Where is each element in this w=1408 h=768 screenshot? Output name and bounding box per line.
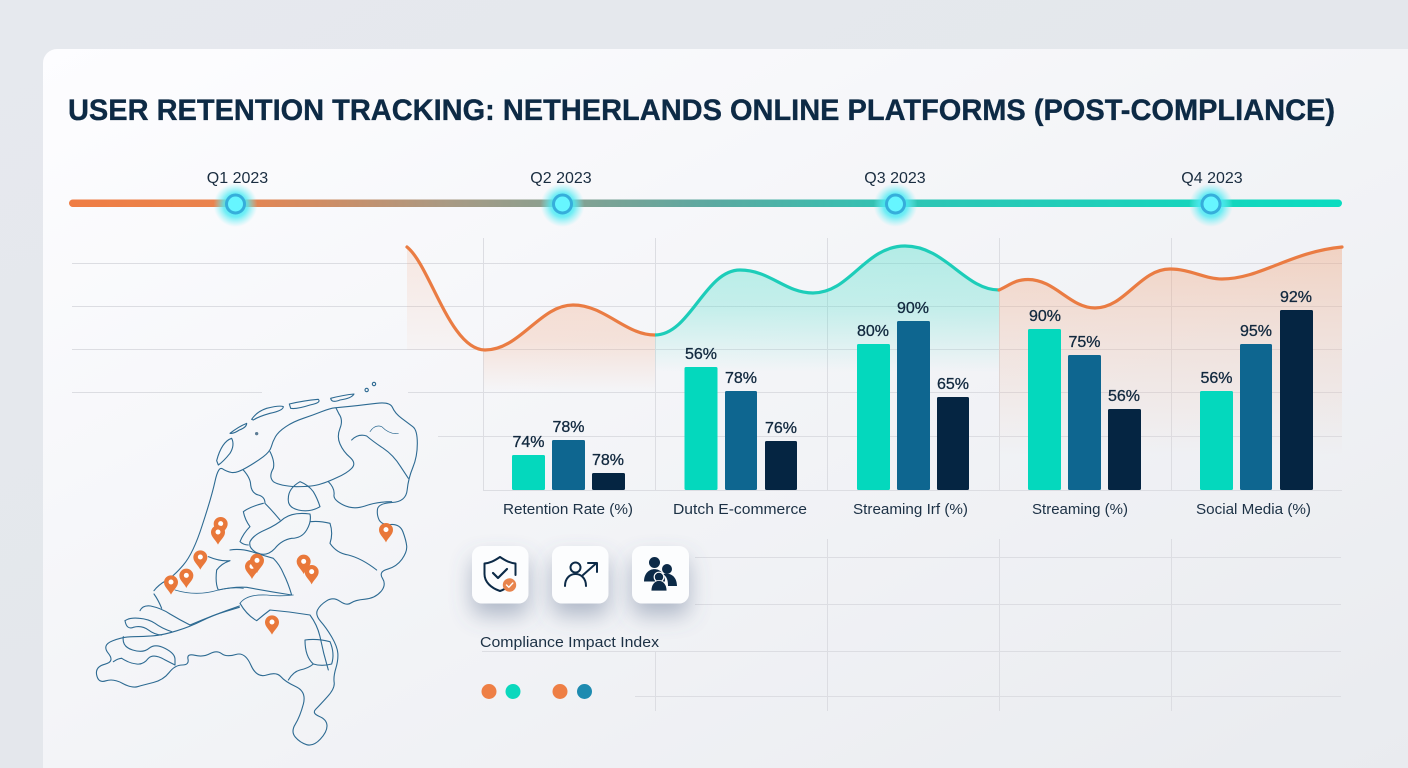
bar group: Retention Rate — [503, 419, 633, 518]
bar group: Social Media: 92% — [1280, 289, 1312, 306]
bar group: Streaming Irf: 80% — [857, 323, 889, 340]
marker: Q2 2023 — [530, 170, 592, 227]
bar group: Streaming: 75% — [1068, 334, 1101, 351]
bar group: Streaming Irf: 65% — [937, 376, 969, 393]
marker: Q2 2023: Q2 2023 — [530, 170, 592, 187]
icon: user group — [632, 546, 689, 604]
bar group: Dutch E-commerce: 78% — [725, 370, 757, 387]
marker: Q1 2023 — [207, 170, 268, 227]
bar group: Dutch E-commerce — [673, 346, 807, 518]
bar group: Social Media: 95% — [1240, 323, 1272, 340]
marker: Q1 2023: Q1 2023 — [207, 170, 268, 187]
timeline bar — [69, 200, 1342, 207]
bar group: Streaming: 56% — [1108, 388, 1140, 405]
location pins — [164, 517, 393, 635]
marker: Q3 2023 — [864, 170, 926, 227]
bar group: Streaming Irf: 90% — [897, 300, 929, 317]
bar group: Streaming Irf — [853, 300, 969, 518]
bar group: Streaming: Streaming (%) — [1032, 501, 1128, 518]
legend dots — [482, 684, 592, 699]
bar group: Social Media: Social Media (%) — [1196, 501, 1311, 518]
title: USER RETENTION TRACKING: NETHERLANDS ONLINE PLATFORMS (POST-COMPLIANCE) — [68, 94, 1335, 127]
bar chart — [503, 289, 1313, 518]
marker: Q4 2023 — [1181, 170, 1243, 227]
bar group: Streaming Irf: Streaming Irf (%) — [853, 501, 968, 518]
bar group: Social Media: 56% — [1200, 370, 1233, 387]
map outline and provinces — [96, 403, 417, 745]
area line chart — [407, 246, 1342, 455]
marker: Q3 2023: Q3 2023 — [864, 170, 926, 187]
bar group: Retention Rate: 78% — [552, 419, 585, 436]
map: Netherlands — [96, 382, 417, 745]
bar group: Social Media — [1196, 289, 1313, 518]
Wadden islands — [217, 382, 376, 465]
bar group: Streaming — [1028, 308, 1141, 518]
bar group: Retention Rate: 74% — [512, 434, 545, 451]
bar group: Retention Rate: 78% — [592, 452, 624, 469]
bar group: Streaming: 90% — [1029, 308, 1061, 325]
bar group: Dutch E-commerce: 76% — [765, 420, 797, 437]
marker: Q4 2023: Q4 2023 — [1181, 170, 1243, 187]
icon: compliance shield — [472, 546, 528, 604]
label: Compliance Impact Index: Compliance Impact Index — [480, 634, 660, 651]
bar group: Retention Rate: Retention Rate (%) — [503, 501, 633, 518]
timeline — [69, 170, 1342, 227]
icon: user growth arrow — [552, 546, 608, 604]
bar group: Dutch E-commerce: 56% — [685, 346, 717, 363]
bar group: Dutch E-commerce: Dutch E-commerce — [673, 501, 807, 518]
